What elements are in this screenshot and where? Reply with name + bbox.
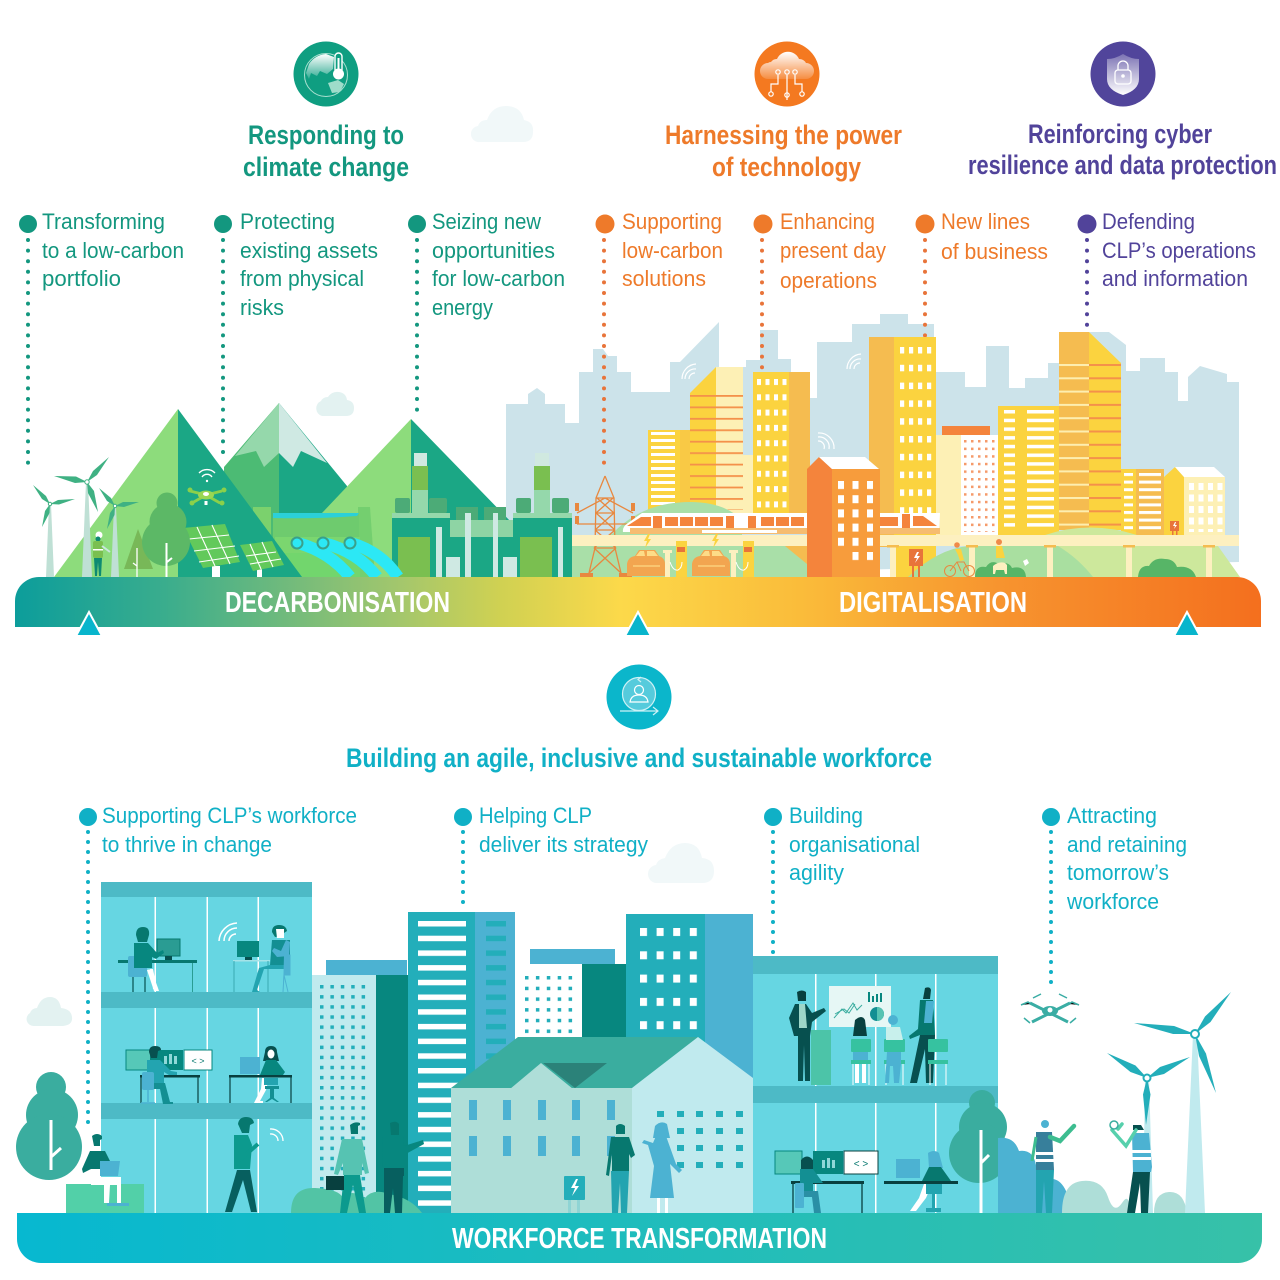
tower: rear dots bbox=[516, 949, 626, 1054]
text block: thrive: to thrive in change bbox=[102, 832, 272, 857]
orange building bbox=[807, 457, 880, 577]
text block: defending: CLP’s operations bbox=[1102, 238, 1256, 263]
text block: new lines bbox=[916, 209, 1048, 264]
office building: right bbox=[753, 956, 998, 1213]
text block: agility: agility bbox=[789, 860, 844, 885]
tower: rear windows bbox=[626, 914, 753, 1084]
mountain: right bbox=[320, 419, 512, 577]
marker triangles bbox=[76, 612, 1200, 636]
city buildings: yellow towers bbox=[648, 337, 936, 577]
text block: enhancing bbox=[754, 209, 886, 293]
solar panels bbox=[183, 524, 284, 577]
text block: transforming bbox=[19, 209, 184, 291]
text block: new lines: of business bbox=[941, 239, 1048, 264]
hills around viaduct bbox=[572, 502, 1240, 577]
text block: transforming: to a low-carbon bbox=[42, 238, 184, 263]
text block: seizing: opportunities bbox=[432, 238, 555, 263]
text block: agility: Building bbox=[789, 803, 863, 828]
banner: workforce transformation: WORKFORCE TRANSFORMATION bbox=[452, 1223, 827, 1255]
train bbox=[623, 513, 940, 534]
tower: light with dots bbox=[312, 960, 408, 1213]
text block: defending bbox=[1078, 209, 1256, 291]
tree: right bbox=[949, 1090, 1009, 1213]
text block: thrive bbox=[79, 803, 357, 857]
text block: enhancing: Enhancing bbox=[780, 209, 875, 234]
person: walking with phone bbox=[225, 1117, 283, 1212]
text block: supporting: Supporting bbox=[622, 209, 722, 234]
charging sign: workforce bbox=[564, 1176, 585, 1213]
cloud: top bbox=[471, 106, 533, 142]
city skyline backdrop bbox=[506, 314, 1239, 577]
people: two women bbox=[606, 1122, 682, 1213]
text block: seizing: for low-carbon bbox=[432, 266, 565, 291]
text block: new lines: New lines bbox=[941, 209, 1030, 234]
tree: left bbox=[16, 1072, 82, 1180]
text block: enhancing: operations bbox=[780, 268, 877, 293]
people: desks right office bbox=[775, 1151, 958, 1213]
heading: technology bbox=[665, 120, 902, 182]
text block: seizing: energy bbox=[432, 295, 493, 320]
icon: shield with padlock bbox=[1090, 42, 1156, 106]
people: desks floor two: < > bbox=[191, 1056, 205, 1066]
wifi: office bbox=[219, 923, 237, 941]
trees: forest bbox=[124, 492, 190, 577]
text block: talent bbox=[1042, 803, 1187, 914]
text block: agility bbox=[764, 803, 920, 885]
text block: strategy: deliver its strategy bbox=[479, 832, 648, 857]
text block: supporting: solutions bbox=[622, 266, 706, 291]
text block: protecting bbox=[214, 209, 378, 320]
text block: talent: Attracting bbox=[1067, 803, 1157, 828]
bush: workforce bbox=[291, 1188, 422, 1213]
workers: engineers bbox=[1032, 1120, 1152, 1213]
text block: talent: and retaining bbox=[1067, 832, 1187, 857]
heading: cyber resilience: Reinforcing cyber bbox=[1028, 119, 1212, 149]
electricity pylon bbox=[575, 476, 635, 577]
drone: teal bbox=[1021, 994, 1079, 1023]
bushes: right bbox=[998, 1138, 1187, 1213]
cyclist and walker bbox=[944, 539, 1029, 576]
text block: seizing: Seizing new bbox=[432, 209, 541, 234]
wind turbines: teal bbox=[1107, 992, 1231, 1213]
people: business pair bbox=[326, 1122, 424, 1213]
presentation scene bbox=[789, 986, 948, 1085]
text block: transforming: portfolio bbox=[42, 266, 121, 291]
city buildings: stripe blocks bbox=[998, 332, 1225, 535]
text block: protecting: from physical bbox=[240, 266, 364, 291]
hydro pipes bbox=[292, 538, 398, 577]
banner: decarbonisation to digitalisation bbox=[15, 577, 1261, 627]
cloud: workforce middle bbox=[648, 843, 714, 883]
banner: decarbonisation to digitalisation: DECARBONISATION bbox=[225, 587, 450, 619]
worker: green bbox=[93, 532, 110, 576]
charging signs bbox=[909, 521, 1179, 577]
text block: protecting: risks bbox=[240, 295, 284, 320]
city wifi signals bbox=[682, 354, 861, 449]
people: desks floor two bbox=[126, 1046, 292, 1104]
banner: decarbonisation to digitalisation: DIGITALISATION bbox=[839, 587, 1027, 619]
dotted leader lines: workforce bbox=[88, 832, 1051, 1125]
power station bbox=[392, 453, 572, 577]
heading: technology: Harnessing the power bbox=[665, 120, 902, 150]
text block: talent: workforce bbox=[1066, 889, 1159, 914]
heading: climate change: climate change bbox=[243, 152, 409, 182]
elevated rail viaduct bbox=[572, 535, 1239, 577]
mountain: back with snow bbox=[224, 403, 347, 577]
text block: strategy: Helping CLP bbox=[479, 803, 592, 828]
icon: agile person bbox=[606, 664, 672, 730]
icon: globe with thermometer bbox=[294, 42, 358, 106]
heading: workforce: Building an agile, inclusive and sustainable workforce bbox=[346, 743, 932, 773]
text block: protecting: existing assets bbox=[240, 238, 378, 263]
mountain: left bbox=[54, 409, 302, 577]
tower: striped bbox=[408, 912, 515, 1213]
house bbox=[451, 1037, 753, 1213]
city buildings: cream and dots bbox=[936, 426, 998, 535]
text block: talent: tomorrow’s bbox=[1067, 860, 1169, 885]
icon: cloud with circuit bbox=[754, 42, 820, 106]
cloud: behind mountains bbox=[316, 392, 354, 416]
person: sitting with laptop bbox=[66, 1134, 144, 1213]
text block: enhancing: present day bbox=[780, 238, 886, 263]
text block: strategy bbox=[454, 803, 648, 857]
cloud: workforce left bbox=[27, 997, 72, 1026]
text block: thrive: Supporting CLP’s workforce bbox=[102, 803, 357, 828]
text block: defending: and information bbox=[1102, 266, 1248, 291]
text block: protecting: Protecting bbox=[240, 209, 335, 234]
heading: climate change: Responding to bbox=[248, 120, 404, 150]
text block: seizing bbox=[408, 209, 565, 320]
text block: supporting bbox=[596, 209, 723, 291]
office building: left bbox=[101, 882, 312, 1213]
people: desks floor one bbox=[118, 925, 290, 992]
people: desks right office: < > bbox=[854, 1159, 868, 1170]
bushes: green bbox=[975, 559, 1196, 577]
heading: cyber resilience bbox=[968, 119, 1277, 180]
heading: climate change bbox=[243, 120, 409, 182]
hydro dam bbox=[253, 507, 375, 577]
dotted leader lines: top bbox=[28, 240, 1087, 472]
text block: transforming: Transforming bbox=[42, 209, 165, 234]
text block: supporting: low-carbon bbox=[622, 238, 723, 263]
text block: defending: Defending bbox=[1102, 209, 1195, 234]
drone with wifi: mountain bbox=[188, 470, 226, 506]
heading: technology: of technology bbox=[712, 152, 861, 182]
charging cars bbox=[627, 534, 754, 577]
banner: workforce transformation bbox=[17, 1213, 1262, 1263]
text block: agility: organisational bbox=[789, 832, 920, 857]
wind turbines: green bbox=[33, 457, 139, 577]
